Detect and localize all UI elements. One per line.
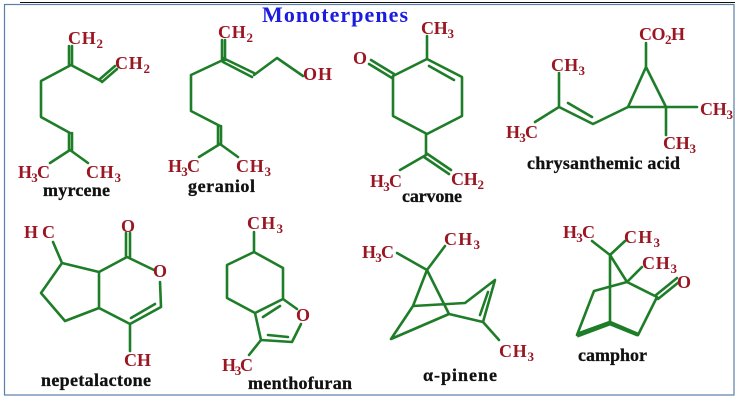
atom labels: camphor: 3 <box>670 261 678 276</box>
atom labels: myrcene: CH <box>115 53 143 73</box>
title: Monoterpenes <box>262 2 408 27</box>
molecule: myrcene <box>18 28 150 200</box>
atom labels: carvone <box>353 18 484 194</box>
atom labels: chrysanthemic acid: C <box>525 122 538 142</box>
name: myrcene: myrcene <box>43 180 110 200</box>
bonds: nepetalactone <box>41 233 161 351</box>
atom labels: camphor: 3 <box>576 230 583 245</box>
atom labels: menthofuran <box>222 213 310 378</box>
atom labels: nepetalactone: H C <box>24 222 55 242</box>
atom labels: camphor: CH <box>624 227 652 247</box>
atom labels: menthofuran: O <box>296 305 310 325</box>
atom labels: camphor <box>563 222 691 292</box>
atom labels: carvone: 2 <box>478 177 484 192</box>
name: menthofuran: menthofuran <box>248 373 352 393</box>
atom labels: menthofuran: CH <box>247 213 275 233</box>
name: nepetalactone: nepetalactone <box>41 370 151 390</box>
atom labels: geraniol: 2 <box>246 30 253 45</box>
atom labels: carvone: H <box>370 171 384 191</box>
name: camphor: camphor <box>578 345 647 365</box>
atom labels: geraniol: C <box>187 156 200 176</box>
atom labels: chrysanthemic acid: CH <box>663 133 690 153</box>
atom labels: carvone: CH <box>451 169 478 189</box>
atom labels: alpha-pinene: C <box>381 242 394 262</box>
molecule: nepetalactone <box>24 216 167 390</box>
atom labels: myrcene: 3 <box>31 170 38 185</box>
name: geraniol: geraniol <box>188 176 255 196</box>
atom labels: chrysanthemic acid: 2 <box>665 32 671 47</box>
atom labels: geraniol: 3 <box>181 164 188 179</box>
atom labels: chrysanthemic acid: H <box>506 122 520 142</box>
atom labels: camphor: CH <box>642 253 670 273</box>
atom labels: alpha-pinene: CH <box>499 341 527 361</box>
atom labels: chrysanthemic acid: CH <box>700 99 727 119</box>
atom labels: myrcene: H <box>18 162 32 182</box>
atom labels: geraniol: H <box>168 156 182 176</box>
bonds: geraniol <box>191 40 303 157</box>
molecule: alpha-pinene <box>362 229 534 385</box>
wedge bonds: camphor <box>577 321 638 337</box>
atom labels: carvone: 3 <box>383 179 390 194</box>
atom labels: chrysanthemic acid: CH <box>551 55 578 75</box>
atom labels: chrysanthemic acid: CO <box>639 24 666 44</box>
atom labels: nepetalactone <box>24 216 167 370</box>
atom labels: alpha-pinene: 3 <box>528 349 534 364</box>
atom labels: myrcene: CH <box>86 162 114 182</box>
atom labels: alpha-pinene: 3 <box>474 237 480 252</box>
atom labels: alpha-pinene: CH <box>444 229 472 249</box>
atom labels: camphor: 3 <box>654 235 660 250</box>
atom labels: chrysanthemic acid: 3 <box>519 130 526 145</box>
atom labels: camphor: H <box>563 222 577 242</box>
molecule: camphor <box>563 222 691 365</box>
atom labels: camphor: O <box>677 272 691 292</box>
bonds: carvone <box>369 36 462 174</box>
molecule: menthofuran <box>222 213 352 393</box>
atom labels: nepetalactone: CH <box>124 350 151 370</box>
atom labels: alpha-pinene: 3 <box>375 250 382 265</box>
atom labels: camphor: C <box>582 222 595 242</box>
atom labels: chrysanthemic acid: 3 <box>690 141 696 156</box>
name: alpha-pinene: α-pinene <box>423 365 497 385</box>
atom labels: carvone: C <box>389 171 402 191</box>
atom labels: myrcene: 2 <box>144 61 150 76</box>
atom labels: myrcene: CH <box>68 28 96 48</box>
atom labels: myrcene: 2 <box>96 36 103 51</box>
molecule: carvone <box>353 18 484 206</box>
atom labels: nepetalactone: O <box>153 261 167 281</box>
atom labels: menthofuran: 3 <box>235 363 242 378</box>
name: chrysanthemic acid: chrysanthemic acid <box>527 153 680 173</box>
atom labels: chrysanthemic acid: H <box>671 24 685 44</box>
atom labels: geraniol: CH <box>218 22 246 42</box>
atom labels: chrysanthemic acid: 3 <box>726 107 734 122</box>
atom labels: menthofuran: H <box>222 355 236 375</box>
bonds: myrcene <box>41 46 117 163</box>
name: carvone: carvone <box>402 186 462 206</box>
atom labels: myrcene: 3 <box>114 170 122 185</box>
atom labels: chrysanthemic acid: 3 <box>578 63 586 78</box>
bonds: chrysanthemic acid <box>535 43 697 135</box>
bonds: alpha-pinene <box>391 246 499 340</box>
bonds: camphor <box>577 241 679 335</box>
atom labels: alpha-pinene: H <box>362 242 376 262</box>
atom labels: geraniol: 3 <box>264 164 272 179</box>
atom labels: alpha-pinene <box>362 229 534 364</box>
molecule: geraniol <box>168 22 332 196</box>
atom labels: menthofuran: 3 <box>276 221 284 236</box>
atom labels: geraniol: OH <box>303 64 332 84</box>
bonds: menthofuran <box>227 232 301 355</box>
atom labels: geraniol: CH <box>236 156 264 176</box>
atom labels: carvone: O <box>353 48 367 68</box>
atom labels: carvone: 3 <box>448 26 454 41</box>
atom labels: carvone: CH <box>421 18 448 38</box>
atom labels: myrcene: C <box>37 162 50 182</box>
atom labels: nepetalactone: O <box>121 216 135 236</box>
atom labels: geraniol <box>168 22 332 179</box>
atom labels: myrcene <box>18 28 150 185</box>
atom labels: menthofuran: C <box>240 355 253 375</box>
atom labels: chrysanthemic acid <box>506 24 734 156</box>
molecule: chrysanthemic acid <box>506 24 734 173</box>
